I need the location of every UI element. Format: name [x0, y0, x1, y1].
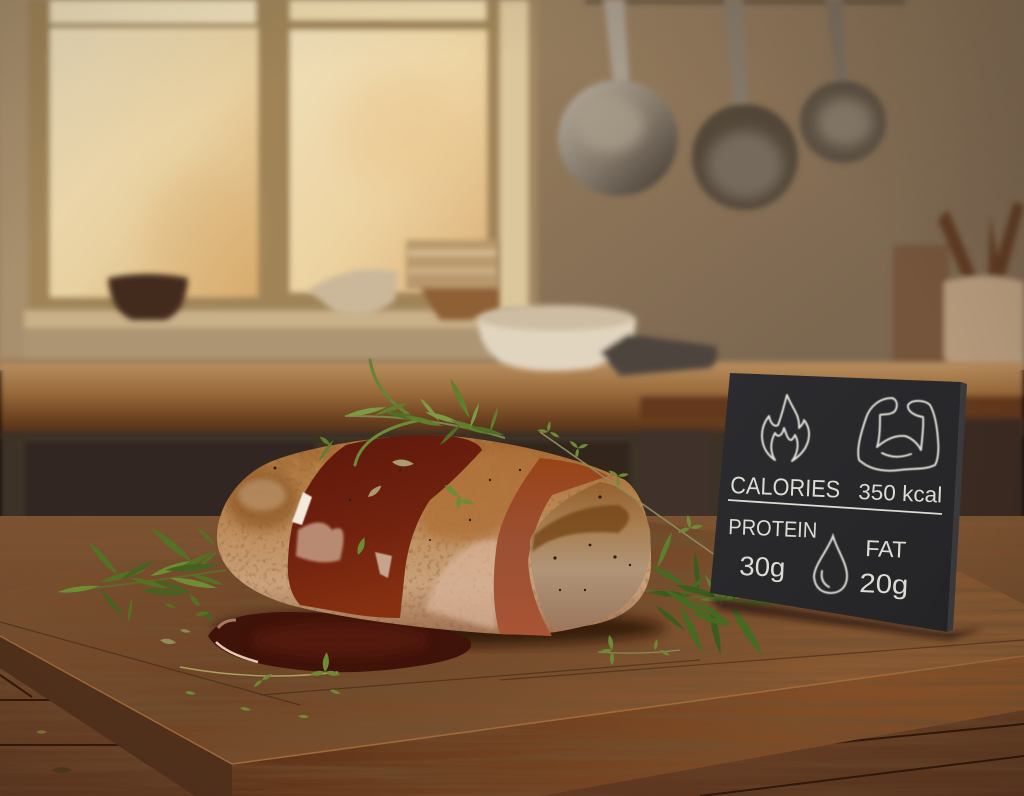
- sauce pool: [208, 612, 471, 672]
- cabinets: [0, 418, 1024, 538]
- divider: [728, 500, 942, 514]
- value: 30g: 30g: [739, 551, 786, 583]
- value: 20g: 20g: [859, 568, 909, 600]
- right-hand utensil crock: [893, 202, 1024, 366]
- board left edge: [0, 636, 232, 796]
- window sill: [0, 310, 534, 368]
- label: protein: PROTEIN: [728, 514, 818, 543]
- sauce drape: [288, 435, 482, 618]
- sauce strip: [494, 458, 608, 636]
- sill crockery: [108, 240, 498, 320]
- label: calories: CALORIES: [730, 472, 841, 504]
- rosemary sprig: top: [317, 360, 505, 465]
- icon: flame: [762, 395, 809, 461]
- label: fat: FAT: [865, 535, 907, 563]
- seared crust patch: [226, 470, 298, 530]
- nutrition chalkboard: [708, 373, 985, 640]
- icon: flexing arm: [858, 398, 938, 471]
- herb garnish and scattered thyme: [36, 459, 680, 773]
- thyme sprig: right: [537, 421, 715, 555]
- board shadow: [708, 596, 985, 640]
- cutting board: [0, 520, 1024, 796]
- blurred kitchen background: [0, 0, 1024, 538]
- hanging pans: [558, 0, 905, 210]
- value: 350 kcal: 350 kcal: [858, 479, 943, 508]
- wall: [0, 0, 1024, 370]
- chalk content: [728, 395, 943, 600]
- wooden table: [0, 516, 1024, 796]
- icon: fat drop: [814, 536, 847, 593]
- rosemary sprig: right: [645, 531, 776, 657]
- counter: [0, 362, 1024, 438]
- stacked bowls on counter: [478, 305, 717, 376]
- window: [0, 0, 538, 370]
- roast body: [217, 435, 651, 635]
- rosemary sprig: left: [58, 525, 226, 634]
- slate: [710, 373, 961, 632]
- crust mottling: [222, 436, 491, 511]
- pepper flecks: [274, 466, 631, 591]
- board top surface: [0, 520, 1024, 764]
- shadow under roast: [215, 610, 665, 646]
- roast end cap: [530, 482, 650, 628]
- roast with sauce: [210, 430, 655, 640]
- board front edge: [232, 656, 1024, 796]
